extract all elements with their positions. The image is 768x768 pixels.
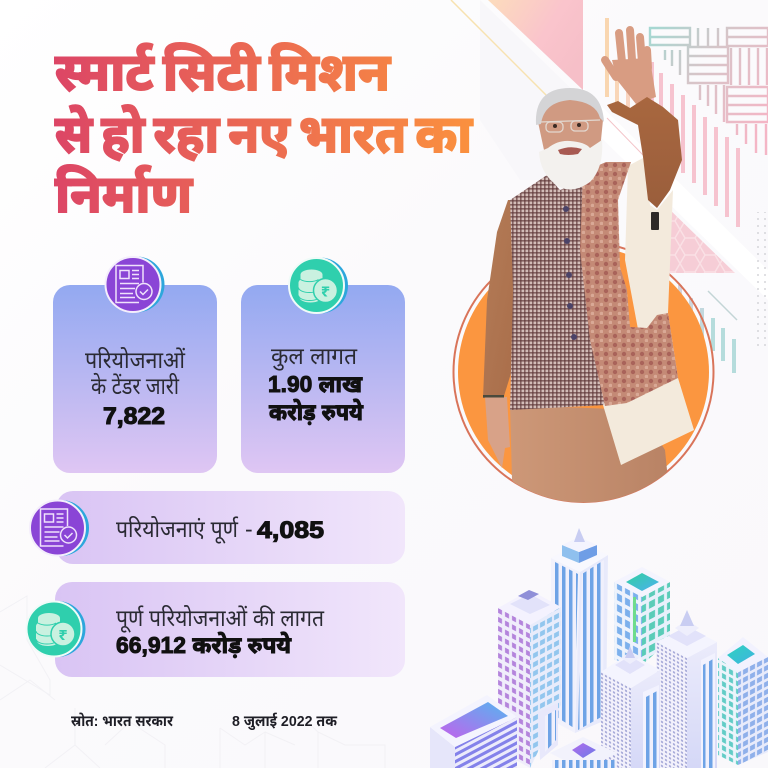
pink triangle top <box>488 0 583 90</box>
patterned shawl <box>580 162 678 406</box>
panel: completed project cost <box>26 582 405 677</box>
icon: rupee coins <box>26 601 86 657</box>
bottom left block <box>430 695 517 768</box>
card text: कुल लागत <box>271 343 358 371</box>
right white tower <box>656 610 717 768</box>
glasses <box>540 120 600 132</box>
title: निर्माण <box>55 165 193 224</box>
icon: document check <box>30 500 89 556</box>
title: से हो रहा नए भारत का <box>55 105 474 164</box>
raised arm sleeve <box>607 97 682 208</box>
row text: पूर्ण परियोजनाओं की लागत <box>116 605 325 633</box>
thin teal line <box>708 291 737 320</box>
basket weave pattern <box>650 28 768 155</box>
source note: स्रोत: भारत सरकार <box>71 713 173 730</box>
card text: के टेंडर जारी <box>91 373 180 399</box>
icon: rupee coins: ₹ <box>58 627 68 644</box>
card text: करोड़ रुपये <box>269 399 363 426</box>
card text <box>85 347 185 430</box>
orange circle with ring <box>454 242 714 502</box>
wrist band <box>483 395 504 398</box>
left purple tower <box>498 590 561 768</box>
card text <box>268 343 363 426</box>
panel: completed project cost: 66,912 करोड़ रुपये <box>116 632 291 659</box>
lower arm <box>483 200 513 398</box>
cream shawl <box>603 158 694 465</box>
panel: completed projects: 4,085 <box>257 517 324 544</box>
green-roof tower <box>614 567 670 665</box>
illustration: waving leader <box>483 30 694 520</box>
panel: total cost <box>241 258 405 473</box>
bottom centre block <box>550 737 617 768</box>
raised hand <box>605 30 656 104</box>
icon: rupee coins: ₹ <box>321 284 330 300</box>
diagonal stripes pink <box>605 18 740 227</box>
left hand <box>485 397 510 468</box>
title <box>55 43 474 224</box>
kurta skirt <box>510 405 667 502</box>
neck and face <box>538 100 603 150</box>
date note: 8 जुलाई 2022 तक <box>232 712 338 731</box>
vest <box>510 175 606 410</box>
thin diagonal line <box>451 0 546 95</box>
far right teal tower <box>718 637 768 765</box>
panel: completed projects <box>30 491 405 564</box>
dot grid <box>752 212 768 347</box>
illustration: isometric buildings <box>430 528 768 768</box>
hexagon triangle <box>665 205 735 273</box>
panel: completed projects: - <box>245 516 253 542</box>
row text: परियोजनाएं पूर्ण <box>116 516 239 544</box>
beard <box>539 140 602 190</box>
tall centre tower <box>551 528 608 733</box>
card text: परियोजनाओं <box>85 347 185 373</box>
thin pink line <box>607 118 643 155</box>
teal stripes <box>678 285 736 373</box>
card text: 7,822 <box>103 403 165 430</box>
panel: tenders issued <box>53 256 217 473</box>
centre white tower <box>601 646 660 768</box>
hair <box>536 88 604 125</box>
icon: document check <box>106 256 164 312</box>
icon: rupee coins <box>289 258 348 314</box>
card text: 1.90 लाख <box>268 371 363 397</box>
watch <box>651 212 659 230</box>
title: स्मार्ट सिटी मिशन <box>55 43 391 102</box>
